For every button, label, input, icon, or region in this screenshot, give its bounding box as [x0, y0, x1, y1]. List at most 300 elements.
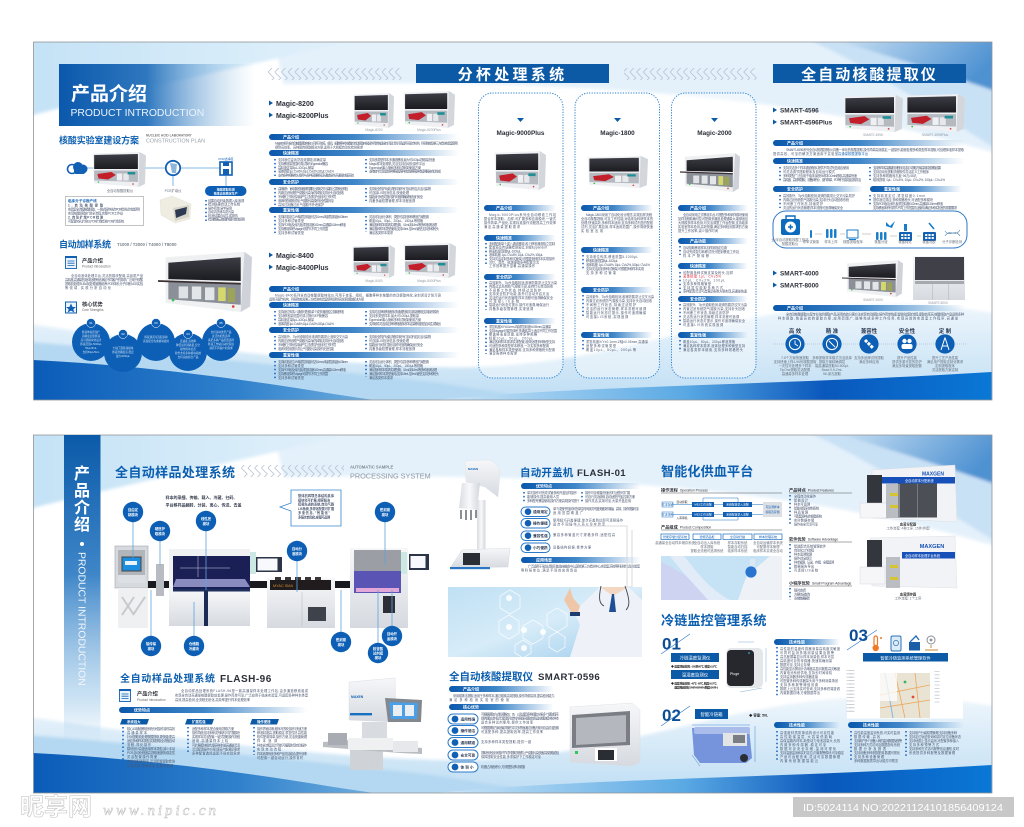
watermark: site logo	[20, 794, 216, 821]
model names: 8400: Magic-8400Plus	[276, 265, 329, 272]
list: advantages: 多种型号兼容使用,操作方便高效操作提升	[527, 498, 580, 503]
marker triangle	[711, 118, 718, 122]
list: repeat: 满足各类样本使用,支持多种规格枪头	[683, 347, 744, 352]
list: fast accuracy	[275, 157, 442, 178]
model names: 8200	[269, 100, 329, 120]
list: software: 自动化工作流程	[794, 548, 815, 552]
circles: core strength items: 降低试剂消耗量,安全	[176, 343, 200, 347]
list: tech 1: 数据可靠,支持云存储	[780, 662, 811, 667]
list: repeat: 覆盖10μL、50μL、200μL等	[586, 347, 637, 352]
icon: hand circle	[166, 161, 180, 175]
list: safety: 液滴可检测提示,防止气溶胶污染,操作安全性能可靠	[278, 198, 335, 203]
pills: core: 体 积 小	[460, 764, 474, 770]
circles: core strength items: 移液范围1-5000μL	[80, 342, 102, 346]
caption: machines	[107, 188, 182, 193]
list: advantages: 操作灵活,实用可靠,大量开盖应用	[585, 498, 631, 503]
text: capacity: ◆ 容量: 50L	[749, 712, 768, 718]
list: safety: 灵活的运行状态管理,样本流程可追溯	[586, 306, 646, 311]
label: core strengths	[82, 300, 104, 312]
section: automatic sample adding system	[59, 238, 252, 372]
machine: flash-96: MAXEN	[351, 695, 364, 699]
list: system: 自动化配置程序,灵活配置提取检测	[127, 758, 175, 764]
flow: process: 样本存储	[662, 503, 673, 507]
list: tech 2: 内置系统数据智能云	[780, 758, 818, 763]
section: smart extractor column	[771, 94, 967, 376]
pills: features: 小巧便携	[533, 545, 548, 550]
text: humidity	[671, 680, 718, 690]
icon: document	[119, 689, 131, 702]
section: flash-96	[119, 672, 422, 770]
boxes: composition: 全自动扫描	[730, 534, 745, 539]
bar: fast accuracy: 快速精准	[283, 302, 299, 308]
list: system: 模块设计高度适用样本类型,减少手动	[127, 746, 175, 751]
bar: safety: 安全防护	[283, 327, 299, 333]
text: intro: 满足多种检测实验室的使用	[449, 697, 509, 702]
circles: core strength items: 支持多种类型产品	[211, 330, 232, 334]
module node labels: 模块	[203, 521, 210, 526]
boxes: composition: 样本管理系统	[759, 534, 777, 539]
module node labels: 自由定	[128, 507, 139, 512]
list: safety and repeat: 支持精准定位,重复精度0.1mm	[873, 193, 925, 198]
list: expansion: 操作简便,支持多种试剂耗材,可扩展模块	[192, 730, 241, 735]
list: repeatability: 满足各种样本类型使用,支持0.5mL至5mL管型,支持多种枪头	[369, 371, 440, 376]
module node labels: 液模块	[292, 551, 303, 556]
list: result details: 检测数据云端储存,随时查询调用	[208, 216, 245, 222]
heading: cup processing system	[416, 64, 609, 83]
list: repeat: 精度10μL、50μL、200μL	[489, 335, 533, 340]
bar: intro: 产品介绍	[463, 686, 479, 692]
paragraph: intro: 实现全自动高通量核酸提取前处理,操作简单可靠,广泛应用于临床实验室,可适配多种样本类型	[175, 692, 309, 698]
list: fast: 多种类型广泛应用于临床,最快96样本10min提取,高通量快速	[783, 173, 858, 178]
machine: smart 4596	[844, 95, 903, 132]
bar: tech 3	[848, 722, 964, 728]
text: application: 广泛适用于采血试管开盖,临床输血中心,医院,第三方检测中心,实验室,高校等科研单位及实验室	[528, 564, 640, 568]
label: temperature monitor	[671, 653, 719, 662]
label: cold box	[695, 709, 728, 719]
model names: 8200: Magic-8200Plus	[276, 113, 329, 120]
image: lab flask	[661, 556, 782, 600]
text: intro: 加样流程精确可控,可配置多通道,处理通量大,能够适应	[678, 216, 749, 221]
heading: extractor	[773, 64, 966, 83]
flow: process: 入库审核	[676, 516, 688, 520]
bar: tech 1: 技术性能	[789, 639, 805, 645]
sub-heading: operation process	[661, 486, 782, 494]
list: safety: 具备多级权限管理,样本流程追溯	[369, 346, 415, 351]
list: fast: 支持液位传感,移液范围5-1000μL	[586, 254, 638, 259]
section: nucleic acid lab construction plan	[59, 134, 246, 226]
list: safety: 支持安全防护功能,流程中紫外灯自动开启灭活污染物	[369, 334, 432, 339]
bar: application: 应用场景	[536, 557, 552, 563]
flow captions: 全/半自动提取核酸工作站	[771, 237, 809, 242]
dotted card	[478, 93, 563, 378]
bar: advantages	[119, 707, 307, 713]
boxes: composition: 智能药品柜	[699, 534, 715, 539]
list: safety: 内置过滤系统防气溶胶污染,Tip防掉落,支持针头自动回收	[278, 190, 345, 195]
text: composition: 智能自动扫描	[728, 544, 748, 549]
list: function: 自动吸取移液样本加样到指定位置	[683, 245, 727, 250]
text: intro: 实验室样本检测,高效快捷,满足多种检测需求的方案	[678, 224, 749, 229]
module node labels: 密封膜	[380, 507, 391, 512]
list: safety: 高效紫外、Tip头拾取检测,液滴防漏,防止交叉污染	[586, 294, 655, 299]
heading	[449, 670, 600, 683]
list: safety: 智能运行状态灯提示,操作可追溯,确保运行安全	[369, 342, 424, 347]
paragraph: product intro: 等领域,实现分析自动化	[65, 285, 112, 290]
circles: core strength items: 移液工作站自动化程度	[208, 342, 234, 346]
paragraph: intro: 全自动样品处理系统FLASH-96是一款高通量样本处理工作站,由多通道移液组成	[181, 688, 309, 693]
model names: smart 4000 8000: SMART-4000	[780, 270, 819, 278]
bar: product intro: 产品介绍	[283, 134, 299, 140]
list: repeat: 满足各种样本需求实现配置,液体处理多种管型支持	[489, 339, 556, 344]
list: repeatability: 支持精准定位,X/Y轴重复精度可达0.1mm,Z轴重复精度±0.05mm	[278, 359, 348, 364]
list: advantages: 单次操作可完成试管多种开盖加样操作	[527, 490, 578, 495]
circles: core strength items: 最大2000μL	[116, 354, 130, 358]
bar: advantages: 优势特点	[536, 483, 552, 489]
icon: location pin	[925, 636, 938, 650]
captions: 灵活提取方案定制	[932, 367, 959, 372]
text: application	[521, 564, 640, 572]
captions: 8200: Magic-8200	[365, 128, 383, 132]
list: safety and repeat: 高效紫外、Tip头拾取检测,液滴防漏,防止交叉污染,防护	[783, 193, 855, 198]
icon: well plates	[899, 223, 936, 241]
circles: core strength items: 高精度定量移液	[82, 334, 100, 338]
list: operation: 操作界面清晰,程序可视化操作,快速方便	[257, 726, 308, 731]
pill: result label	[205, 186, 246, 196]
pills: features: 使用轻巧开盖便捷,单次开盖到位即可连续操作	[553, 518, 624, 522]
list: repeatability: 覆盖10μL、50μL、200μL、1000μL等规格	[369, 363, 424, 368]
pills: features: 兼容多种管盖尺寸规格多样,适配性高	[553, 532, 615, 537]
captions: 支持快速上样4-96份核酸提取	[774, 359, 817, 364]
captions: SMART-4000	[863, 298, 883, 302]
bar: tech 2: 技术性能	[789, 722, 805, 728]
list: fast accuracy: 液体精度 1μL: CV≤5%, 10μL: CV≤2%, 100μL: CV≤1%	[278, 169, 334, 174]
text: composition	[655, 540, 784, 553]
list: operation: 可配置一键自动运行,操作省时	[257, 755, 304, 760]
list: safety	[275, 334, 432, 351]
list: tech 1: 数据上云支持实时查询,支持多种终端查看	[780, 686, 840, 691]
label: product intro: 产品介绍	[82, 256, 103, 264]
heading: english subtitle: NUCLEIC ACID LABORATORY	[146, 134, 193, 138]
bar: tech 1	[774, 639, 840, 645]
list: safety: 液滴可检测提示,防止气溶胶污染,操作安全性能	[278, 346, 335, 351]
panel: magic 2000	[672, 93, 756, 378]
list: repeat	[486, 324, 557, 356]
module nodes	[123, 502, 402, 663]
list: repeatability: 支持移液体积Voyage可调节,不同工作范围	[278, 371, 328, 376]
list: expansion: 适用,高通量样本上机	[192, 738, 229, 743]
list: fast: 移液精度范围5μL-1000μL	[489, 248, 521, 253]
list: repeatability: 支持多种试管类型	[278, 218, 305, 223]
list: software: 样本追溯管理	[794, 552, 813, 556]
list: fast accuracy	[275, 309, 441, 326]
bar: safety: 安全防护	[496, 274, 512, 280]
captions: 8400	[365, 279, 441, 283]
device: monitor	[726, 642, 766, 692]
vertical band: product introduction: 品	[74, 483, 90, 500]
list: advantages: 可自行灵活使用,自动适配开盖,控制方便	[585, 494, 636, 499]
bar: safety: 安全防护	[283, 179, 299, 185]
list: fast: 可灵活调节提取程序及自动运行模式	[783, 169, 836, 174]
list: software: 智能配合系统管理软件	[794, 544, 827, 548]
text: intro: 提供高效、可靠的解决方案适用于实验室	[773, 151, 838, 156]
machine: barcode post	[156, 564, 164, 596]
bar: function	[678, 238, 748, 244]
text: intro: 高通量核酸提取平台	[838, 151, 868, 156]
list: fast	[486, 241, 556, 268]
list: expansion	[188, 726, 241, 756]
captions: 96-深孔提取	[823, 371, 842, 376]
caption: platform two: 血液储存器	[900, 592, 917, 596]
list: expansion: 灵活配置操作方案,提高产能满足需求	[192, 746, 241, 752]
model names: smart 4596: SMART-4596	[780, 108, 819, 114]
text: intro	[484, 212, 557, 229]
list: repeatability: 满足各类样本需求	[369, 230, 394, 235]
bar: safety: 安全防护	[690, 296, 706, 302]
dotted card	[575, 93, 660, 378]
sub-heading: product composition: 产品组成 Product Composition	[661, 524, 711, 530]
list: software: 操作,信息提示	[794, 556, 812, 560]
icon: medical kit	[781, 216, 800, 235]
list: advantages: 操作可靠便捷,快速省时,适配可扩展	[585, 490, 631, 495]
bar: repeatability	[269, 207, 459, 213]
tag labels: 操作便捷	[257, 719, 271, 724]
bar: intro	[449, 686, 554, 692]
list: tech 3: 多种数据报表导出功能打印预览	[854, 758, 898, 763]
pills: core	[448, 712, 560, 772]
flow captions: 核酸提取程序	[843, 239, 864, 244]
list: fast: 液体精度: 1μL: CV≤5%, 10μL: CV≤2%, 100μL	[489, 252, 543, 257]
machine: magic 8200	[353, 93, 394, 128]
captions: 8200: Magic-8200Plus	[417, 128, 441, 132]
callout box: molecular diagnostics: 实现核酸提取扩增全流程,完整PCR工作站	[68, 210, 124, 216]
list: features: 可配套多种试剂提取系统	[794, 514, 823, 518]
list: safety	[486, 280, 558, 311]
text: intro: 全自动核酸提取仪是专业化的提取产品,采用有效分离方法实现自动提取,操作简单快速,智能化提取流程,提取效率高,核酸提取产品适用多种	[786, 312, 964, 316]
text: intro	[773, 147, 965, 156]
list: operation: 样本追溯系统,多种产品灵活组合,提升效率	[257, 751, 308, 756]
text: composition: 全自动出入库系统	[694, 540, 721, 545]
text: intro	[778, 312, 964, 320]
module node labels: 线性度	[201, 516, 212, 521]
number 01	[661, 634, 690, 654]
machine: refrigerated unit	[267, 577, 335, 628]
bar: product intro: 产品介绍	[283, 286, 299, 292]
captions: 提升产品性能	[897, 355, 918, 360]
list: fast: 高纯度、高效率提取、设备体积小、操作简单、PCR等下游实验应用灵活	[783, 177, 862, 182]
flow captions: 核酸分液	[874, 239, 888, 244]
list: expansion: 实现样本灵活配置,一键式提取操作流程	[192, 734, 241, 739]
list: fast accuracy: 支持灵活多种移液程序,多通道配置灵活精准移液,支持操作模块	[369, 309, 440, 314]
icon: cloud	[68, 162, 88, 174]
bar: repeatability	[269, 352, 459, 358]
feature row: five strengths: 兼容性	[861, 327, 878, 335]
captions: 提升工艺产品性能	[932, 355, 959, 360]
heading: english: AUTOMATIC SAMPLE	[350, 464, 394, 470]
list: repeatability	[275, 214, 440, 235]
model name: Magic-1800	[600, 130, 635, 137]
list: safety: 智能运行状态灯提示,操作可追溯,确保运行	[489, 302, 550, 307]
list: system: 流程,简化操作	[127, 742, 152, 747]
heading	[120, 672, 272, 685]
list: safety: 内置过滤系统防气溶胶污染,支持针头回收	[683, 306, 746, 311]
flow captions: 样本试管架	[803, 239, 820, 244]
callout box: molecular diagnostics: 1.自动核酸提取	[68, 202, 104, 208]
screenshot: map dashboard	[847, 665, 963, 718]
list: safety and repeat: 提供液位感应,多种规格枪头,可适配多种模块	[873, 197, 934, 202]
label: software: 智能冷链监测系统管理软件	[880, 654, 931, 661]
module node labels: 模块	[148, 646, 155, 651]
bar: fast	[773, 158, 965, 164]
decorative frame	[576, 526, 632, 587]
list: safety: 高效紫外、Tip头拾取检测,液滴防漏,防止液体交叉污染	[278, 334, 349, 339]
list: tech 2: 数据可靠安全存储,监测可视化	[780, 746, 837, 751]
pills: features	[521, 506, 640, 552]
dotted card	[672, 93, 756, 378]
text: intro: 全自动采用立式移液平台,可搭配多种采样模块使用	[683, 212, 748, 217]
list: fast: 10μL: CV≤2%, 100μL	[683, 278, 725, 282]
list: operation	[254, 726, 308, 760]
machine: monitor two	[409, 554, 429, 570]
model names: 8400: Magic-8400	[276, 253, 314, 260]
circles: core strength items: 04	[186, 332, 190, 336]
vertical band: product introduction: PRODUCT INTRODUCTION	[76, 552, 86, 686]
circles: core strength items	[72, 318, 240, 372]
boxes: composition: 智能存储分配系统	[663, 534, 687, 539]
paragraph: product intro: 高精度,高通量的液体处理系统,满足不同客户的需求,广泛用于核酸	[65, 277, 144, 282]
list: safety: 可连接LIS检测信息,快速处理	[369, 190, 410, 195]
list: tech 1: 可同时监测多路测量结果及报警	[780, 650, 835, 655]
bar: intro	[678, 205, 748, 211]
paragraph: intro	[175, 688, 309, 702]
bar: safety	[678, 296, 748, 302]
heading: 全自动样品处理系统	[120, 672, 215, 685]
list: safety: 可连接LIS系统,实现追溯	[586, 314, 628, 319]
marker triangle	[614, 118, 621, 122]
list: system	[123, 726, 176, 768]
watermark: site logo: www.nipic.cn	[103, 803, 216, 819]
bar: fast accuracy	[269, 302, 459, 308]
list: repeatability: 灵活可靠运行,体积、类型可定制多种移液方案配置	[369, 359, 429, 364]
list: tech 3: 支持用户多个设备入网的监测数据及报警	[854, 738, 903, 743]
list: system: 适应多种样本类型,实现提取全流程自动	[127, 738, 175, 743]
flow diagram	[771, 211, 967, 248]
heading: FLASH-01	[577, 468, 626, 479]
list: tech 1: 可配置多种传感器探头用于多种测量场景	[780, 678, 838, 683]
list: repeatability: 灵活可靠运行,体积、类型可定制多种移液方案配置	[369, 214, 429, 219]
tags	[120, 719, 279, 724]
text: product intro: 适用于医疗机构、科研院校及第三方检测实验室使用,提供高效率提取解决方案	[269, 296, 365, 302]
paragraph: product intro: 全自动液体处理平台,灵活的模块配置,高品质产品	[71, 273, 143, 278]
bar: safety	[269, 179, 459, 185]
list: repeatability: 支持多种试管类型	[278, 230, 305, 235]
list: fast accuracy: Eppendorf离心管和多种试管架使用方案	[369, 165, 422, 170]
bar: advantages	[521, 483, 641, 489]
callout: LIS系统,多样化配置可扩展	[298, 506, 335, 511]
captions: 8400: Magic-8400	[365, 279, 383, 283]
list: tech 3: 支持地图上显示监测,可配置多种接入	[909, 738, 960, 743]
model names: smart 4000 8000: SMART-8000	[780, 282, 819, 290]
list: tech 1: 内置电池系统供电,支持长时间待机	[780, 670, 833, 675]
circles: core strength items: 操作简单灵活	[180, 347, 196, 351]
pills: core: 安全可靠	[460, 752, 476, 758]
list: result details: 检测结果自动生成报告	[208, 213, 238, 218]
list: tech 3: 支持多种预警方式	[909, 742, 940, 747]
module node labels: 取模块	[155, 531, 166, 536]
list: safety	[680, 302, 748, 327]
bar: product intro	[269, 134, 459, 140]
list: repeatability: 支持多种试管类型	[278, 363, 305, 368]
flow captions	[771, 237, 963, 246]
flow: process: 自动抓取	[676, 500, 688, 504]
pills: core: 可选配多种,提高提取效率,提高工作效率	[481, 729, 544, 734]
machine: smart-0596	[570, 703, 640, 766]
circles: core strength items: 七轴丁面移液模块	[113, 346, 134, 350]
module node labels: 接传输	[146, 641, 157, 646]
bar: fast	[484, 235, 556, 241]
pills: features: 适用范围覆盖广	[553, 510, 583, 515]
list: mini program: 方便信息查询	[794, 592, 810, 596]
list: tech 1: 支持多种报警阈值设置	[780, 682, 818, 687]
list: safety: 可连接LIS系统实现追溯	[683, 322, 723, 327]
list: tech 2: 高强度材质防摔结构设计可靠性能	[780, 730, 835, 735]
list: fast: 支持混匀吸取多种方式	[683, 285, 724, 290]
captions	[774, 355, 964, 376]
caption: platform one: 血液分配器	[900, 522, 917, 526]
label: product intro	[82, 256, 111, 268]
list: repeatability: 支持移液体积Voyage可调节,不同工作范围	[278, 226, 328, 231]
text: intro: 操作简单,产品化,实现标准操作流程提高工作效率	[484, 220, 557, 225]
machine: smart 4000	[842, 260, 903, 297]
bar: tech 3: 技术性能	[863, 722, 879, 728]
text: intro: 试剂,灵活扩展应用,样本适用范围广,操作简便快速	[581, 224, 654, 229]
number 02	[661, 706, 690, 726]
icon: floppy	[218, 156, 234, 175]
heading: extractor: 全自动核酸提取仪	[801, 65, 938, 83]
list: tech 3: 支持多种设备管理	[854, 754, 885, 759]
list: operation: 软件配置简单,操作方便,灵活快捷管理	[257, 734, 308, 739]
title block: product introduction	[59, 64, 255, 126]
bar: fast accuracy	[269, 150, 459, 156]
list: mini program: 随时查看	[794, 588, 806, 592]
text: intro: Magic-9000Plus系列全自动移液工作站	[489, 212, 557, 217]
pills: core: 适合多种试剂使用,提供工作效率	[481, 720, 534, 724]
icon: star box	[66, 302, 76, 313]
list: tech 3: 支持多种方式访问报警信息通知,实时	[909, 746, 960, 751]
heading: 全自动样品处理系统	[115, 465, 235, 480]
list: safety and repeat: 灵活的运行状态管理,样本流程可追溯确保安全	[783, 205, 844, 210]
pill: result label: 精准高效稳定生产	[214, 190, 238, 195]
text: intro: 样本提取,快速高效的提取方案,应用范围广,能够完成多种工作任务,实现高效的实验室工作程序,高通量	[778, 316, 959, 320]
module node labels: 核苷酸	[373, 646, 384, 651]
list: features: 样本可追溯	[794, 502, 810, 506]
circles: core strength items: 满足不同客户的需求	[209, 346, 233, 350]
list: fast: 移液精度范围5μL-1000μL	[586, 258, 618, 263]
captions: SMART-8000	[928, 301, 948, 305]
number 03	[847, 626, 877, 650]
module node labels: 硬度护	[155, 526, 166, 531]
title block: product introduction: PRODUCT INTRODUCTION	[70, 108, 204, 119]
list: system: 针对提取前处理核酸提取,更快捷,更高	[127, 734, 175, 739]
icon: floppy: PCR洁净区	[218, 156, 234, 161]
list: repeat	[583, 339, 649, 352]
feature row: five strengths	[773, 327, 966, 376]
bar: repeat: 重复性强	[593, 332, 609, 338]
list: repeatability: 支持精准定位,X/Y轴重复精度可达0.1mm,Z轴重复精度±0.05mm	[278, 214, 348, 219]
pills: core: 可根据提取方案设置,简便的中文多界面,通过设备方便,可自由灵活配置	[481, 725, 559, 730]
captions: 满足用户提取定制化需求	[927, 359, 964, 364]
list: system: 高通量样本	[127, 730, 148, 735]
list: repeat: 满足各种样本类型使用,支持多种规格枪头配置	[489, 347, 555, 352]
machine: blood platform one	[860, 465, 957, 522]
